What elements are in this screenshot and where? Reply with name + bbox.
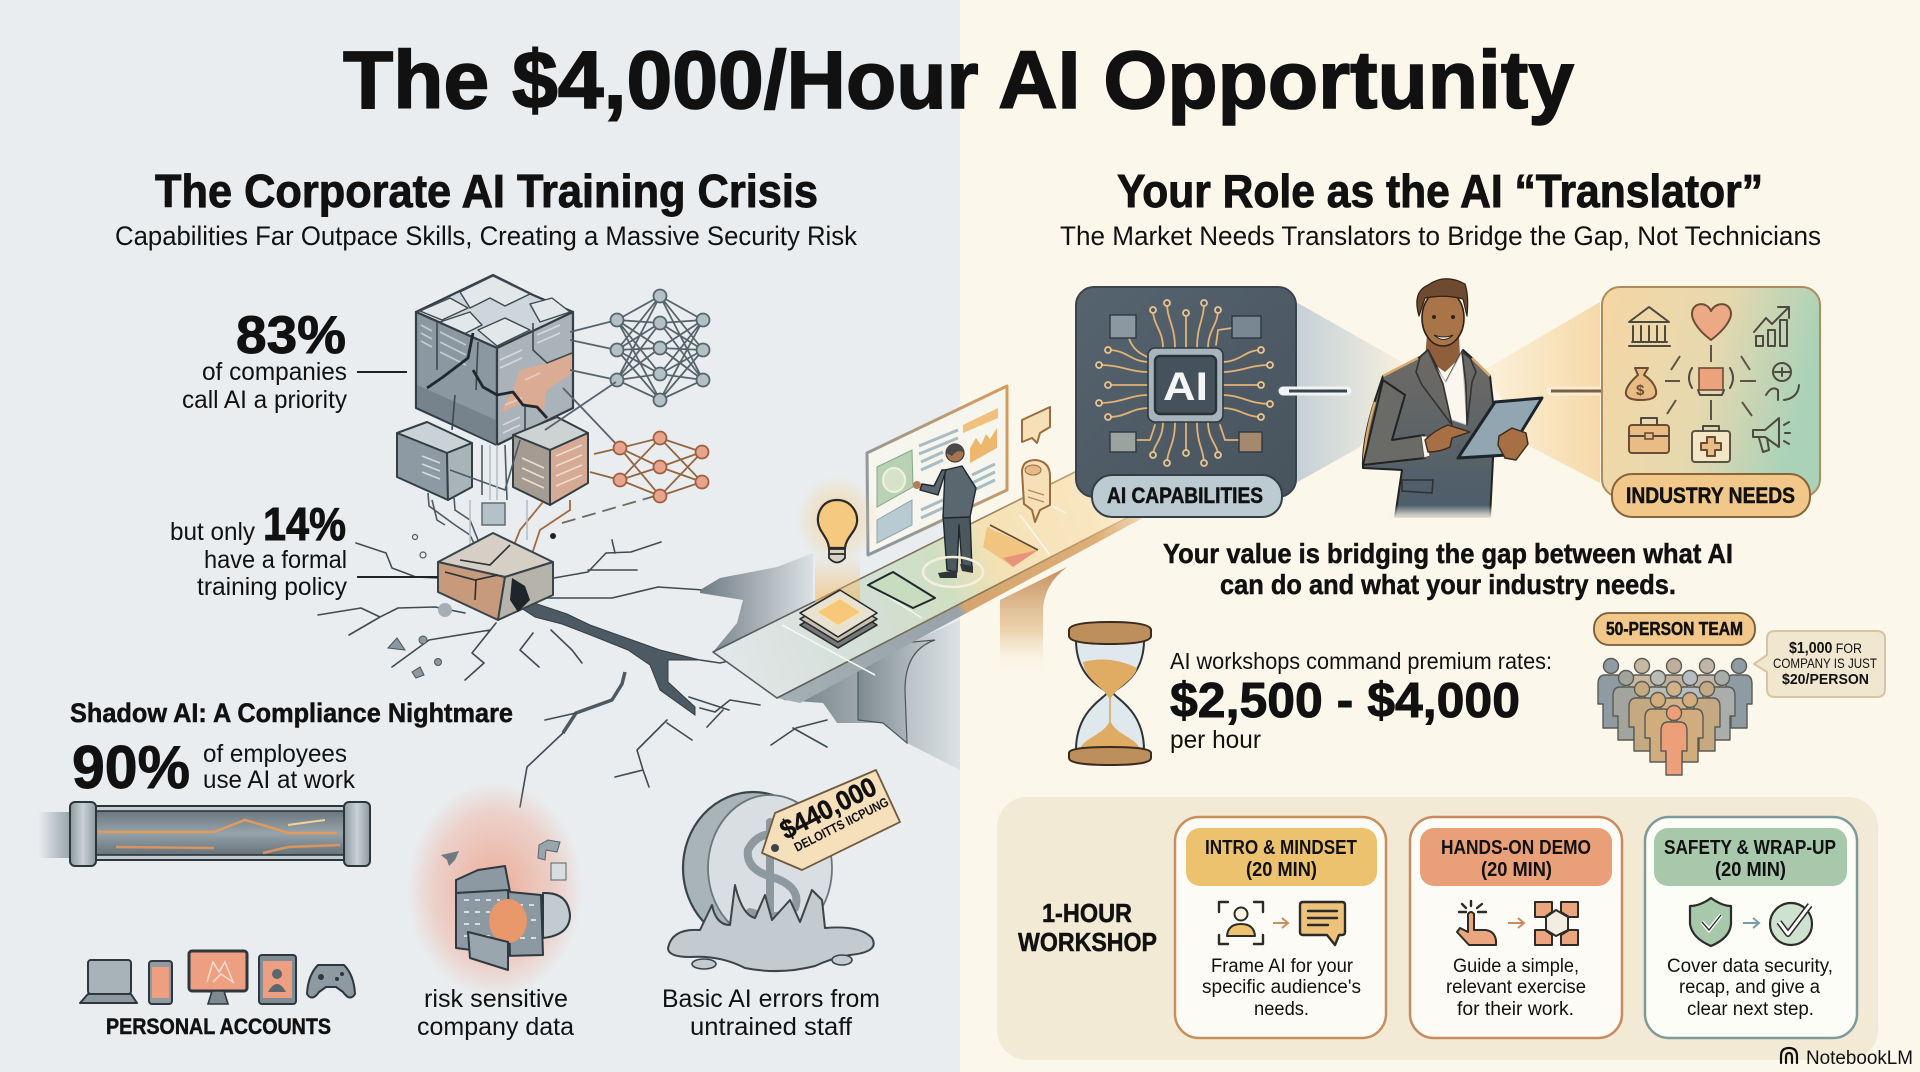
icon: gamepad xyxy=(307,965,355,998)
90% figure: 90% xyxy=(72,734,190,801)
pricing text xyxy=(1170,648,1552,754)
value statement xyxy=(1163,538,1733,600)
shadow AI heading: Shadow AI: A Compliance Nightmare xyxy=(70,698,513,728)
bridge edge xyxy=(777,506,1150,703)
pricing intro: AI workshops command premium rates: xyxy=(1170,648,1552,674)
cube top blocks xyxy=(420,276,570,346)
beam: left xyxy=(1296,302,1402,483)
right pier xyxy=(1000,567,1067,675)
puddle drops xyxy=(692,959,716,969)
deck panel lines xyxy=(782,505,1066,675)
heading: right section xyxy=(1060,165,1821,251)
ring under man xyxy=(923,557,983,587)
14% figure: 14% xyxy=(263,498,346,550)
cube right face xyxy=(497,312,573,445)
value statement line 1: Your value is bridging the gap between what AI xyxy=(1163,538,1733,569)
83% figure: 83% xyxy=(236,306,346,365)
icon: phone xyxy=(149,961,172,1004)
pipe outer wall xyxy=(90,806,352,860)
pipe xyxy=(38,802,370,866)
card 1 body line 2: specific audience's xyxy=(1202,977,1361,998)
value statement line 2: can do and what your industry needs. xyxy=(1220,569,1676,600)
cube orange patch xyxy=(500,353,572,413)
chasm and bridge xyxy=(700,472,1150,770)
screen brain glyph xyxy=(883,468,905,492)
icon: speech bubble xyxy=(1300,902,1345,945)
smile xyxy=(1434,335,1453,340)
price tag xyxy=(762,770,900,870)
tag hole xyxy=(771,844,779,852)
icon: check circle xyxy=(1770,903,1812,945)
person with tablet xyxy=(1363,279,1542,519)
screen orange header xyxy=(963,408,998,433)
puddle xyxy=(668,885,874,971)
screen text lines xyxy=(919,430,995,518)
connector: AI panel to person xyxy=(1283,386,1347,396)
icon: hourglass xyxy=(1069,622,1151,765)
callout: cost per person xyxy=(1754,631,1885,697)
card 1 body line 1: Frame AI for your xyxy=(1211,956,1354,977)
neck xyxy=(1425,335,1460,372)
card 2 frame xyxy=(1410,817,1622,1038)
right subheading text: The Market Needs Translators to Bridge the Gap, Not Technicians xyxy=(1060,221,1821,251)
risk caption line 2: company data xyxy=(417,1013,574,1041)
cube face lines xyxy=(421,325,466,365)
title: The $4,000/Hour AI Opportunity xyxy=(343,35,1574,126)
small floating block xyxy=(482,503,505,525)
errors caption line 2: untrained staff xyxy=(690,1013,852,1041)
floating pin xyxy=(1022,460,1050,522)
errors caption line 1: Basic AI errors from xyxy=(662,985,880,1013)
panel: 1-hour workshop xyxy=(997,797,1878,1060)
small standing man xyxy=(913,444,976,578)
card 2 body line 3: for their work. xyxy=(1457,999,1574,1020)
stat: 90 percent xyxy=(72,734,355,801)
screen blue panel xyxy=(877,500,912,543)
errors caption xyxy=(662,985,880,1041)
left small cube xyxy=(397,422,472,500)
14% leader line xyxy=(357,576,438,578)
flying scraps xyxy=(538,840,560,860)
shirt xyxy=(1425,352,1467,425)
deck box xyxy=(983,525,1038,567)
hourglass glass xyxy=(1076,640,1144,750)
big cube xyxy=(416,275,573,445)
hourglass top cap xyxy=(1069,622,1151,644)
stat: 83 percent xyxy=(182,306,407,414)
card 3 header line 1: SAFETY & WRAP-UP xyxy=(1664,837,1836,859)
icon: audience focus xyxy=(1219,902,1263,944)
eyes xyxy=(1432,315,1436,319)
left subheading text: Capabilities Far Outpace Skills, Creating a Massive Security Risk xyxy=(115,221,857,251)
cube left lower shade xyxy=(417,385,496,444)
AI panel background xyxy=(1076,287,1296,497)
panel: AI capabilities xyxy=(1076,287,1296,517)
left background xyxy=(0,0,960,1072)
left cuff xyxy=(1421,436,1430,458)
man hair and head xyxy=(946,444,964,462)
card 1 header xyxy=(1186,828,1377,886)
hourglass sand stream xyxy=(1109,695,1111,722)
callout line 3: $20/PERSON xyxy=(1782,671,1869,688)
chip top glow xyxy=(816,598,862,626)
coin edge xyxy=(683,792,823,944)
fade at bottom xyxy=(1390,505,1495,519)
right heading text: Your Role as the AI “Translator” xyxy=(1117,165,1763,217)
pipe tail xyxy=(38,812,74,858)
card 1 header line 2: (20 MIN) xyxy=(1246,859,1317,881)
83% caption line 1: of companies xyxy=(202,358,347,386)
tag small text: DELOITTS IICPUNG xyxy=(792,794,891,855)
icon: medkit xyxy=(1692,426,1730,462)
90% caption line 2: use AI at work xyxy=(203,766,355,794)
card 1 body line 3: needs. xyxy=(1254,999,1309,1020)
suit jacket xyxy=(1363,350,1495,517)
cube top face xyxy=(416,275,573,348)
falling connector wires xyxy=(412,440,570,560)
document specks xyxy=(464,900,538,938)
icon: bank xyxy=(1629,307,1670,346)
back document xyxy=(456,866,543,956)
industry panel background xyxy=(1602,287,1820,497)
card 1 frame xyxy=(1175,817,1386,1038)
pocket xyxy=(1402,480,1433,493)
card 3 body line 1: Cover data security, xyxy=(1667,956,1833,977)
right hand xyxy=(1498,428,1528,460)
card 3 header line 2: (20 MIN) xyxy=(1715,859,1786,881)
50-person team pill xyxy=(1594,613,1755,645)
bulb glow xyxy=(795,475,879,565)
cube seams xyxy=(437,322,572,430)
icon: team of people xyxy=(1598,658,1752,775)
AI capabilities pill xyxy=(1092,475,1282,517)
workshop label line 2: WORKSHOP xyxy=(1018,927,1157,957)
icon: puzzle pieces xyxy=(1535,902,1578,945)
corner glyphs xyxy=(1110,315,1262,452)
left heading text: The Corporate AI Training Crisis xyxy=(155,165,818,217)
bridge deck xyxy=(713,472,1150,698)
tablet on deck xyxy=(868,572,935,608)
ground rubble xyxy=(388,603,452,678)
14% caption line 2: training policy xyxy=(197,573,347,601)
bulb base xyxy=(829,549,845,562)
card: hands-on demo xyxy=(1410,817,1622,1038)
card 2 header line 1: HANDS-ON DEMO xyxy=(1441,837,1591,859)
cube cracks xyxy=(427,333,547,418)
workshop label line 1: 1-HOUR xyxy=(1042,898,1132,928)
industry needs label: INDUSTRY NEEDS xyxy=(1626,483,1795,508)
ground cracks xyxy=(318,540,827,807)
right scrap xyxy=(543,893,570,938)
left hand xyxy=(1425,425,1470,452)
callout line 2: COMPANY IS JUST xyxy=(1773,655,1877,671)
red risk glow xyxy=(407,782,583,998)
beam: right xyxy=(1484,302,1600,483)
arrow card 1 xyxy=(1273,918,1288,928)
but only text: but only xyxy=(170,518,255,546)
card: safety and wrap-up xyxy=(1645,817,1857,1038)
bottom broken cube xyxy=(438,533,553,620)
50-person team text: 50-PERSON TEAM xyxy=(1606,619,1743,639)
stat: 14 percent xyxy=(170,498,438,601)
top neural network xyxy=(570,290,710,406)
icon: heart xyxy=(1692,304,1731,340)
panel: industry needs xyxy=(1602,287,1820,517)
workshop label xyxy=(1018,898,1157,957)
icon: money bag: $ xyxy=(1636,382,1645,399)
hair xyxy=(1417,279,1468,316)
icon: tablet xyxy=(259,955,296,1004)
pipe tube xyxy=(92,811,350,855)
devices row xyxy=(80,951,355,1004)
14% caption line 1: have a formal xyxy=(204,546,347,574)
icon: gauge and hands xyxy=(1766,363,1799,400)
chasm and left pier xyxy=(783,620,960,770)
circuit traces xyxy=(1096,300,1273,466)
middle document xyxy=(456,890,510,955)
front document xyxy=(468,932,508,970)
card 2 header line 2: (20 MIN) xyxy=(1481,859,1552,881)
personal accounts label: PERSONAL ACCOUNTS xyxy=(106,1014,331,1039)
NotebookLM text: NotebookLM xyxy=(1806,1048,1913,1069)
callout line 1: $1,000 FOR xyxy=(1789,640,1862,657)
card 3 body line 2: recap, and give a xyxy=(1679,977,1820,998)
hourglass top sand xyxy=(1083,660,1137,700)
head xyxy=(1422,290,1464,346)
NotebookLM logo xyxy=(1781,1048,1797,1063)
man legs xyxy=(943,515,972,572)
card 2 body line 2: relevant exercise xyxy=(1446,977,1586,998)
sensitive data fragments xyxy=(441,840,570,970)
shoulder highlight xyxy=(1364,358,1490,462)
tablet xyxy=(1458,398,1542,458)
icon: laptop xyxy=(80,960,137,1003)
pricing unit: per hour xyxy=(1170,726,1261,754)
screen bar chart xyxy=(970,428,997,463)
man shoes xyxy=(938,564,973,578)
arrow card 2 xyxy=(1508,918,1524,928)
83% leader line xyxy=(357,371,407,373)
man arm xyxy=(920,470,946,495)
pricing amount: $2,500 - $4,000 xyxy=(1170,674,1520,728)
lapels xyxy=(1416,350,1476,425)
risk caption line 1: risk sensitive xyxy=(424,985,568,1013)
icon: tapping hand xyxy=(1457,901,1496,945)
card 2 body line 1: Guide a simple, xyxy=(1453,956,1579,977)
AI chip text: AI xyxy=(1163,365,1208,409)
connector: person to industry panel xyxy=(1551,386,1613,396)
risk caption xyxy=(417,985,574,1041)
icon: shield xyxy=(1690,898,1731,946)
hourglass bottom cap xyxy=(1069,747,1151,765)
card 3 body line 3: clear next step. xyxy=(1687,999,1814,1020)
floating speech bubble xyxy=(1022,407,1050,443)
NotebookLM mark xyxy=(1781,1048,1913,1069)
heading: left section xyxy=(115,165,857,251)
card 1 header line 1: INTRO & MINDSET xyxy=(1205,837,1357,859)
hub spokes xyxy=(1665,345,1756,420)
screen xyxy=(867,386,1007,555)
left arm xyxy=(1363,380,1425,465)
bulb glass xyxy=(818,500,857,548)
card 3 header xyxy=(1654,828,1847,886)
industry needs pill xyxy=(1612,474,1810,517)
screen green panel xyxy=(877,450,913,507)
melting coin with price tag xyxy=(668,770,900,971)
man torso xyxy=(943,466,976,518)
icon: central hub xyxy=(1689,368,1733,395)
light beam xyxy=(815,555,860,620)
90% caption line 1: of employees xyxy=(203,740,347,768)
workshop background xyxy=(997,797,1878,1060)
coin dollar sign xyxy=(748,822,800,925)
coin face xyxy=(708,795,832,941)
card: intro and mindset xyxy=(1175,817,1386,1038)
AI chip xyxy=(1148,348,1223,422)
card 2 header xyxy=(1420,828,1612,886)
pipe glow lines xyxy=(98,820,337,833)
icon: briefcase xyxy=(1629,418,1669,453)
lightbulb on chip stack xyxy=(795,475,879,648)
cube left face xyxy=(416,312,497,445)
icon: megaphone xyxy=(1753,418,1790,452)
right small orange cube xyxy=(513,417,588,505)
orange circle xyxy=(489,899,527,943)
83% caption line 2: call AI a priority xyxy=(182,386,347,414)
right background xyxy=(960,0,1920,1072)
chip stack xyxy=(800,602,877,648)
icon: growth chart xyxy=(1754,307,1789,346)
tag amount: $440,000 xyxy=(775,771,881,845)
hourglass bottom sand xyxy=(1080,720,1140,750)
pipe right flange xyxy=(344,802,370,866)
chasm wall upper xyxy=(700,553,813,652)
left pier arch xyxy=(858,640,935,743)
icon: monitor xyxy=(189,951,247,1004)
man hand xyxy=(913,481,921,489)
pipe left flange xyxy=(70,802,96,866)
AI capabilities label: AI CAPABILITIES xyxy=(1107,483,1263,508)
arrow card 3 xyxy=(1743,918,1759,928)
card 3 frame xyxy=(1645,817,1857,1038)
bottom orange neural network xyxy=(545,382,708,523)
icon: money bag xyxy=(1626,368,1656,400)
